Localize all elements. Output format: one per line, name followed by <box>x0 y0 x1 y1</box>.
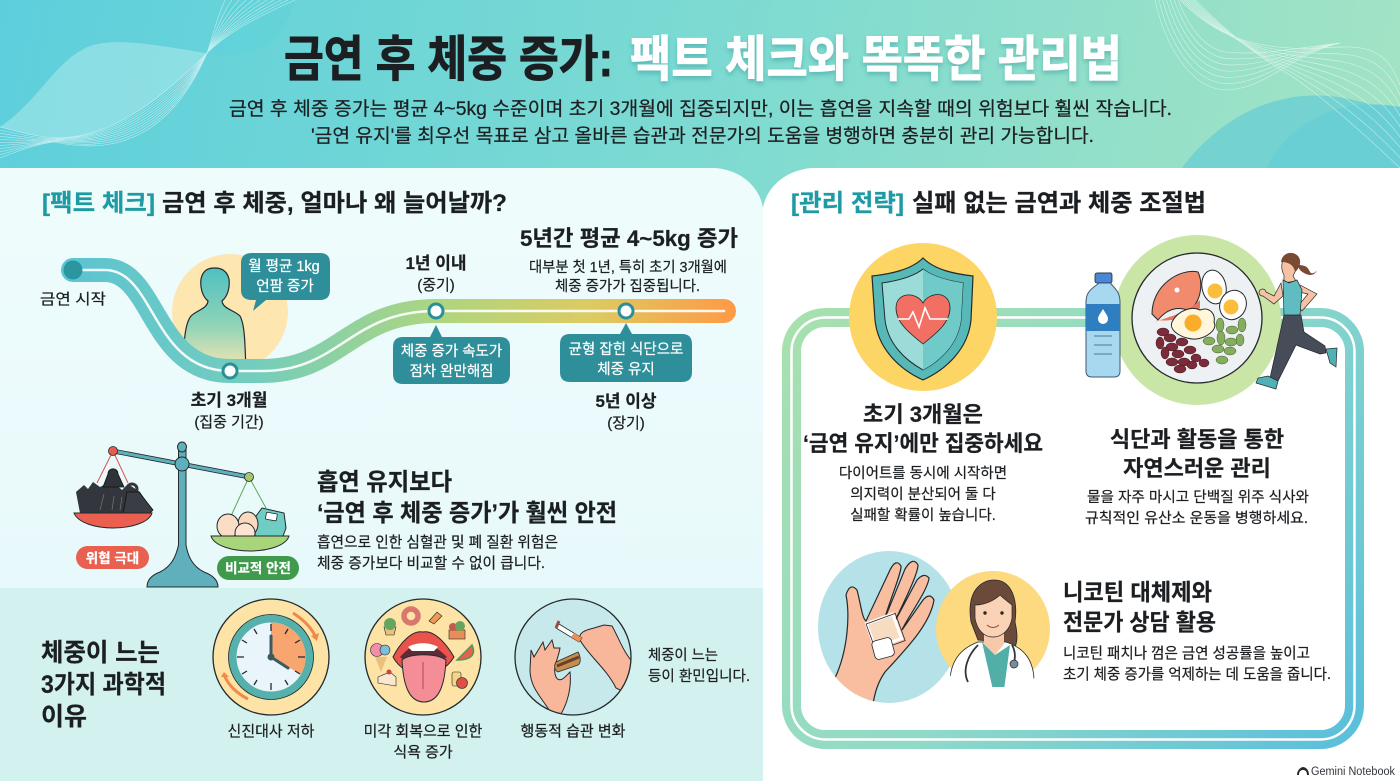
frame <box>792 318 1354 740</box>
icon: plate, water and runner <box>1086 235 1337 405</box>
text: safer message: 흡연 유지보다 <box>317 469 452 496</box>
title: 금연 후 체중 증가: <box>284 33 613 87</box>
text: focus on quitting: 다이어트를 동시에 시작하면 <box>839 465 1007 482</box>
text: five-year gain <box>520 226 738 295</box>
illustration: person silhouette <box>172 254 288 359</box>
text: safer message: ‘금연 후 체중 증가’가 훨씬 안전 <box>317 500 617 527</box>
callout: balanced diet: 균형 잡힌 식단으로 <box>569 341 683 358</box>
beam and stand <box>113 449 249 479</box>
callout: balanced diet: 체중 유지 <box>597 361 655 378</box>
food: cupcake <box>384 618 396 635</box>
icon: shield with heart <box>849 243 997 391</box>
text: cut off note <box>648 647 750 685</box>
text: diet and activity: 자연스러운 관리 <box>1123 456 1271 481</box>
callout: slowing gain: 체중 증가 속도가 <box>401 343 502 360</box>
text: nicotine replacement <box>1063 579 1331 683</box>
badge: relatively safe: 비교적 안전 <box>225 561 291 576</box>
left strings and weights <box>74 451 153 528</box>
panel: management strategy <box>791 190 1395 778</box>
heading: three reasons: 이유 <box>41 703 87 731</box>
subtitle <box>229 98 1172 147</box>
logo: Gemini Notebook: Gemini Notebook <box>1311 766 1395 778</box>
callout: monthly gain: 언팜 증가 <box>256 278 314 295</box>
text: diet and activity: 물을 자주 마시고 단백질 위주 식사와 <box>1087 489 1309 506</box>
label: taste recovery: 미각 회복으로 인한 <box>364 723 483 740</box>
food: ice cream <box>370 644 390 672</box>
badge: relatively safe <box>217 556 299 580</box>
label: early 3 months <box>191 391 267 431</box>
panel: right background <box>763 168 1400 781</box>
text: nicotine replacement: 니코틴 패치나 껌은 금연 성공률을 높이고 <box>1063 645 1310 662</box>
badge: extreme risk: 위협 극대 <box>86 551 139 566</box>
text: focus on quitting: 실패할 확률이 높습니다. <box>850 507 996 524</box>
title <box>284 33 1122 87</box>
label: within 1 year: (중기) <box>417 277 455 294</box>
label: taste recovery: 식욕 증가 <box>393 744 453 761</box>
heading: strategy: [관리 전략] <box>791 190 904 217</box>
label: within 1 year: 1년 이내 <box>405 254 467 273</box>
label: metabolism: 신진대사 저하 <box>228 723 315 740</box>
heading: three reasons: 체중이 느는 <box>41 639 160 667</box>
heading: three reasons <box>41 639 166 731</box>
text: safer message: 체중 증가보다 비교할 수 없이 큽니다. <box>317 555 545 572</box>
heading: fact check: [팩트 체크] <box>42 190 155 217</box>
food: donut <box>404 609 418 623</box>
panel: three reasons <box>0 588 763 781</box>
text: diet and activity: 규칙적인 유산소 운동을 병행하세요. <box>1085 510 1308 527</box>
label: over 5 years: (장기) <box>607 415 645 432</box>
heading: strategy: 실패 없는 금연과 체중 조절법 <box>912 190 1206 217</box>
text: nicotine replacement: 전문가 상담 활용 <box>1063 609 1216 635</box>
heading: three reasons: 3가지 과학적 <box>41 671 166 699</box>
text: diet and activity: 식단과 활동을 통한 <box>1110 427 1284 452</box>
callout: balanced diet <box>560 323 692 382</box>
label: over 5 years <box>595 392 657 432</box>
text: cut off note: 등이 환민입니다. <box>648 668 750 685</box>
label: taste recovery <box>364 723 483 761</box>
subtitle: 금연 후 체중 증가는 평균 4~5kg 수준이며 초기 3개월에 집중되지만, 이는 흡연을 지속할 때의 위험보다 훨씬 작습니다. <box>229 98 1172 120</box>
text: focus on quitting: 의지력이 분산되어 둘 다 <box>850 486 996 503</box>
text: focus on quitting: ‘금연 유지’에만 집중하세요 <box>803 431 1043 456</box>
subtitle: '금연 유지'를 최우선 목표로 삼고 올바른 습관과 전문가의 도움을 병행하면 충분히 관리 가능합니다. <box>311 125 1094 147</box>
food: basket <box>449 621 465 639</box>
text: nicotine replacement: 니코틴 대체제와 <box>1063 579 1212 605</box>
text: five-year gain: 대부분 첫 1년, 특히 초기 3개월에 <box>529 259 727 276</box>
icon: plate <box>1132 253 1262 383</box>
callout: monthly gain <box>241 253 330 311</box>
icon: doctor <box>936 571 1050 690</box>
icon: runner <box>1256 253 1337 389</box>
title: 팩트 체크와 똑똑한 관리법 <box>630 33 1122 87</box>
callout: monthly gain: 월 평균 1kg <box>248 258 320 275</box>
text: five-year gain: 체중 증가가 집중됩니다. <box>555 278 700 295</box>
label: early 3 months: 초기 3개월 <box>191 391 267 410</box>
illustration: balance scale <box>74 442 289 587</box>
panel: fact check <box>0 168 763 588</box>
heading: fact check: 금연 후 체중, 얼마나 왜 늘어날까? <box>162 190 507 217</box>
food: watermelon <box>457 645 473 660</box>
callout: slowing gain: 점차 완만해짐 <box>409 363 494 380</box>
icon: water bottle <box>1086 273 1120 377</box>
text: focus on quitting <box>803 402 1043 524</box>
text: cut off note: 체중이 느는 <box>648 647 718 664</box>
icon: hands with cigarette and snack <box>514 598 632 716</box>
right strings, eggs and device <box>211 477 289 551</box>
text: diet and activity <box>1085 427 1309 527</box>
text: focus on quitting: 초기 3개월은 <box>863 402 983 427</box>
timeline markers <box>223 304 633 378</box>
text: nicotine replacement: 초기 체중 증가를 억제하는 데 도움을 줍니다. <box>1063 666 1331 683</box>
label: start: 금연 시작 <box>40 291 106 308</box>
icon: hand with patch and gum <box>818 551 960 704</box>
callout: slowing gain <box>393 325 510 384</box>
badge: extreme risk <box>76 546 149 569</box>
text: five-year gain: 5년간 평균 4~5kg 증가 <box>520 226 738 251</box>
food: cake <box>378 670 396 686</box>
food: fruit <box>452 672 468 688</box>
timeline curve <box>64 260 724 371</box>
label: over 5 years: 5년 이상 <box>595 392 657 411</box>
label: behaviour: 행동적 습관 변화 <box>521 723 626 740</box>
text: safer message: 흡연으로 인한 심혈관 및 폐 질환 위험은 <box>317 534 558 551</box>
icon: clock <box>213 599 329 715</box>
food: drumstick <box>429 612 442 624</box>
label: within 1 year <box>405 254 467 294</box>
text: safer message <box>317 469 617 572</box>
icon: mouth and food <box>365 599 481 715</box>
label: early 3 months: (집중 기간) <box>194 414 264 431</box>
